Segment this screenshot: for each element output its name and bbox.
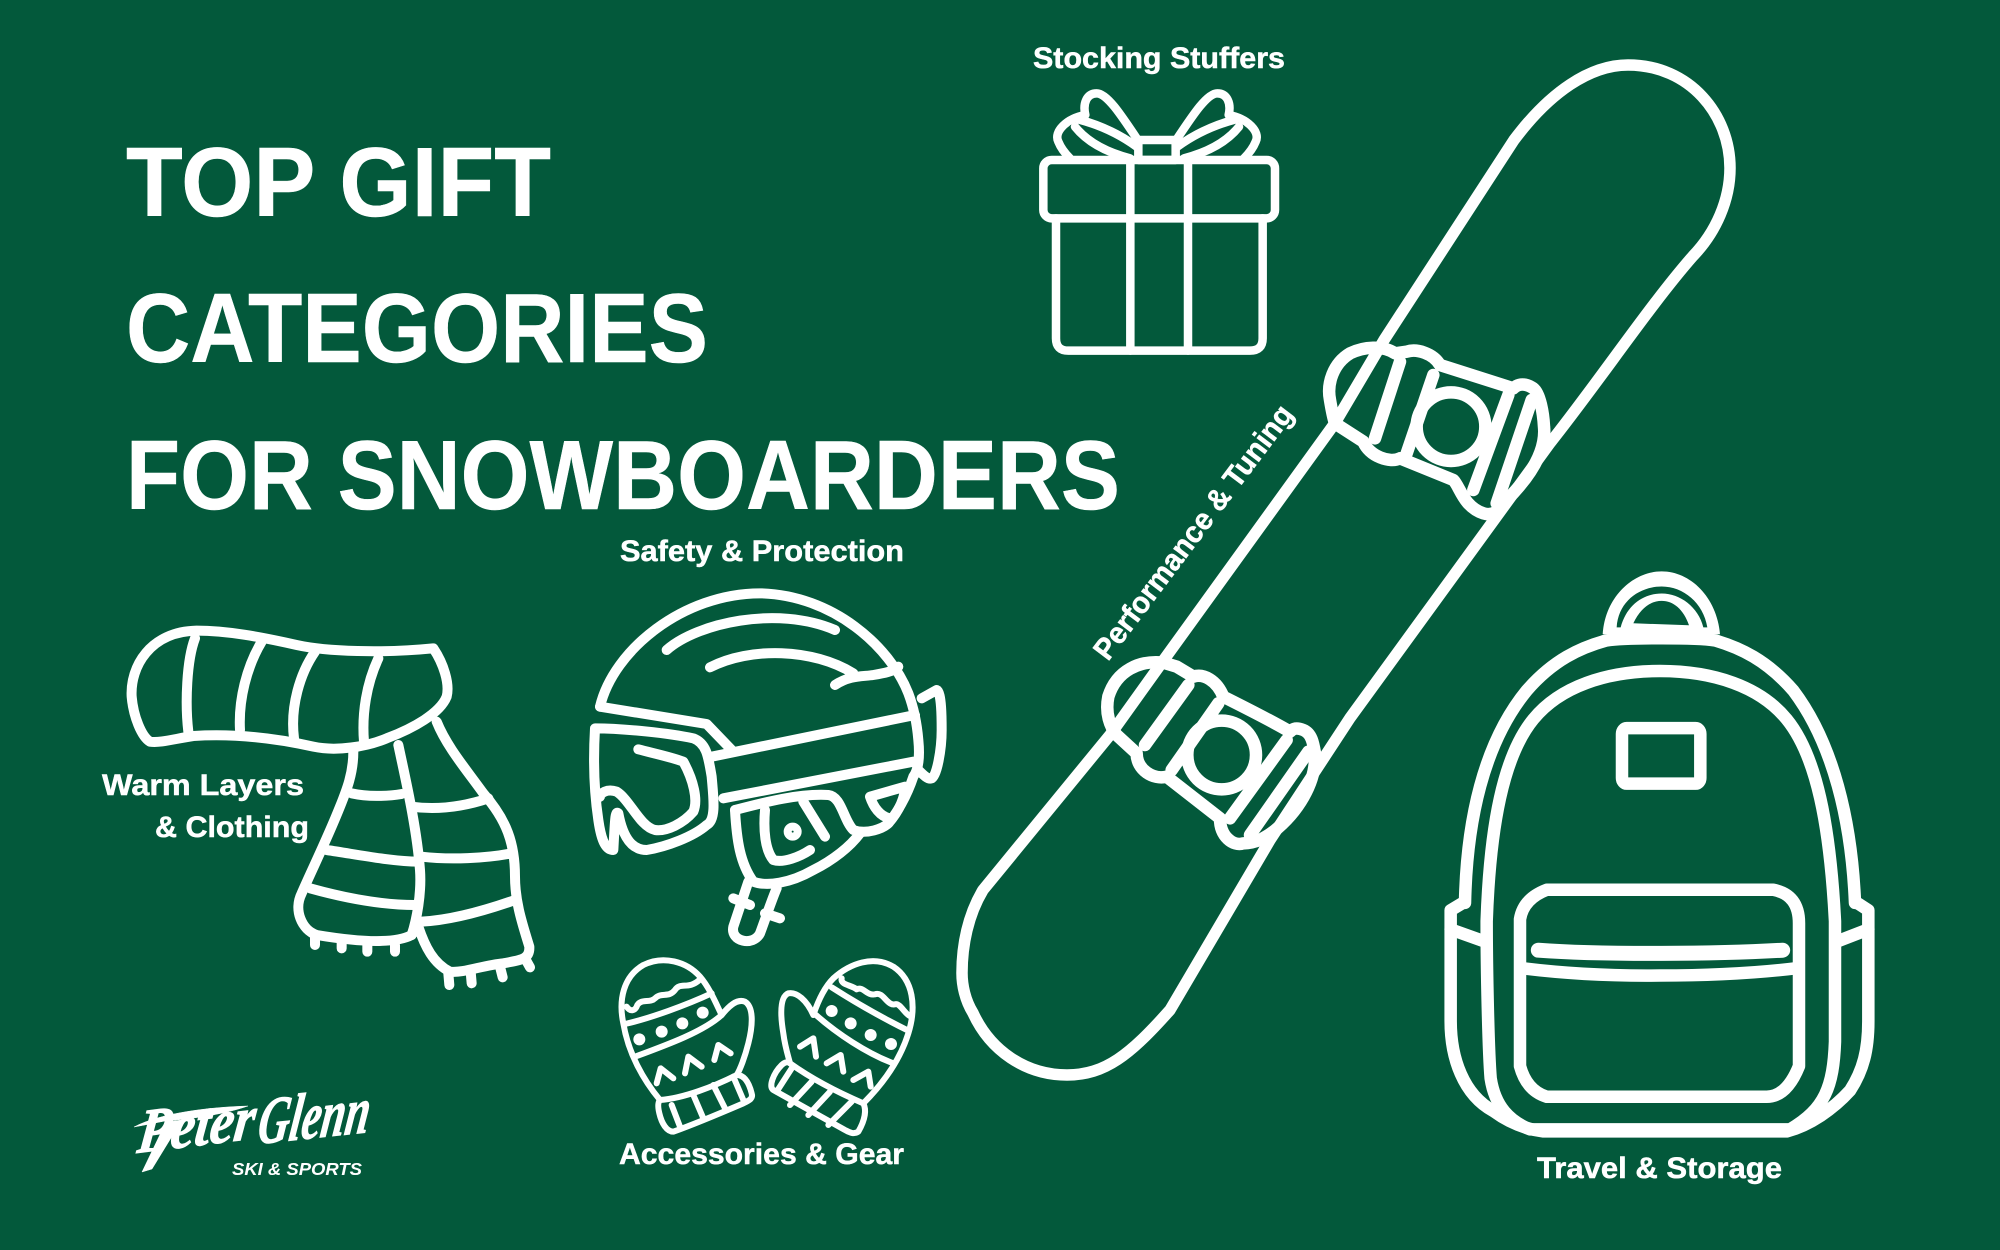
icon: mittens xyxy=(622,960,913,1133)
upper binding xyxy=(1329,348,1544,514)
title: FOR SNOWBOARDERS xyxy=(126,420,1120,530)
title xyxy=(126,127,1120,530)
label: travel and storage: Travel & Storage xyxy=(1537,1152,1782,1185)
logo: Peter Glenn Ski & Sports: SKI & SPORTS xyxy=(232,1159,362,1179)
board outline xyxy=(962,65,1730,1075)
icon: gift box xyxy=(1043,93,1275,351)
left mitten xyxy=(622,960,752,1132)
label: performance and tuning: Performance & Tuning xyxy=(1087,399,1300,666)
logo: Peter Glenn Ski & Sports: Glenn xyxy=(254,1073,376,1159)
label: accessories and gear: Accessories & Gear xyxy=(619,1138,904,1171)
label: warm layers and clothing: Warm Layers xyxy=(102,769,304,802)
handle xyxy=(1603,571,1720,634)
icon: scarf xyxy=(132,631,530,985)
icon: snowboard xyxy=(962,65,1730,1075)
icon: helmet xyxy=(594,593,942,941)
title: TOP GIFT xyxy=(126,127,551,237)
label: warm layers and clothing: & Clothing xyxy=(155,811,309,844)
icon: backpack xyxy=(1451,571,1868,1131)
body and pockets xyxy=(1451,638,1868,1131)
logo: Peter Glenn Ski & Sports: Peter xyxy=(133,1082,260,1167)
title: CATEGORIES xyxy=(126,273,708,383)
lower binding xyxy=(1107,662,1315,844)
label: warm layers and clothing xyxy=(102,769,309,844)
label: safety and protection: Safety & Protection xyxy=(620,535,904,568)
logo: Peter Glenn Ski & Sports xyxy=(133,1073,376,1179)
label: stocking stuffers: Stocking Stuffers xyxy=(1033,42,1285,75)
right mitten xyxy=(771,961,913,1133)
